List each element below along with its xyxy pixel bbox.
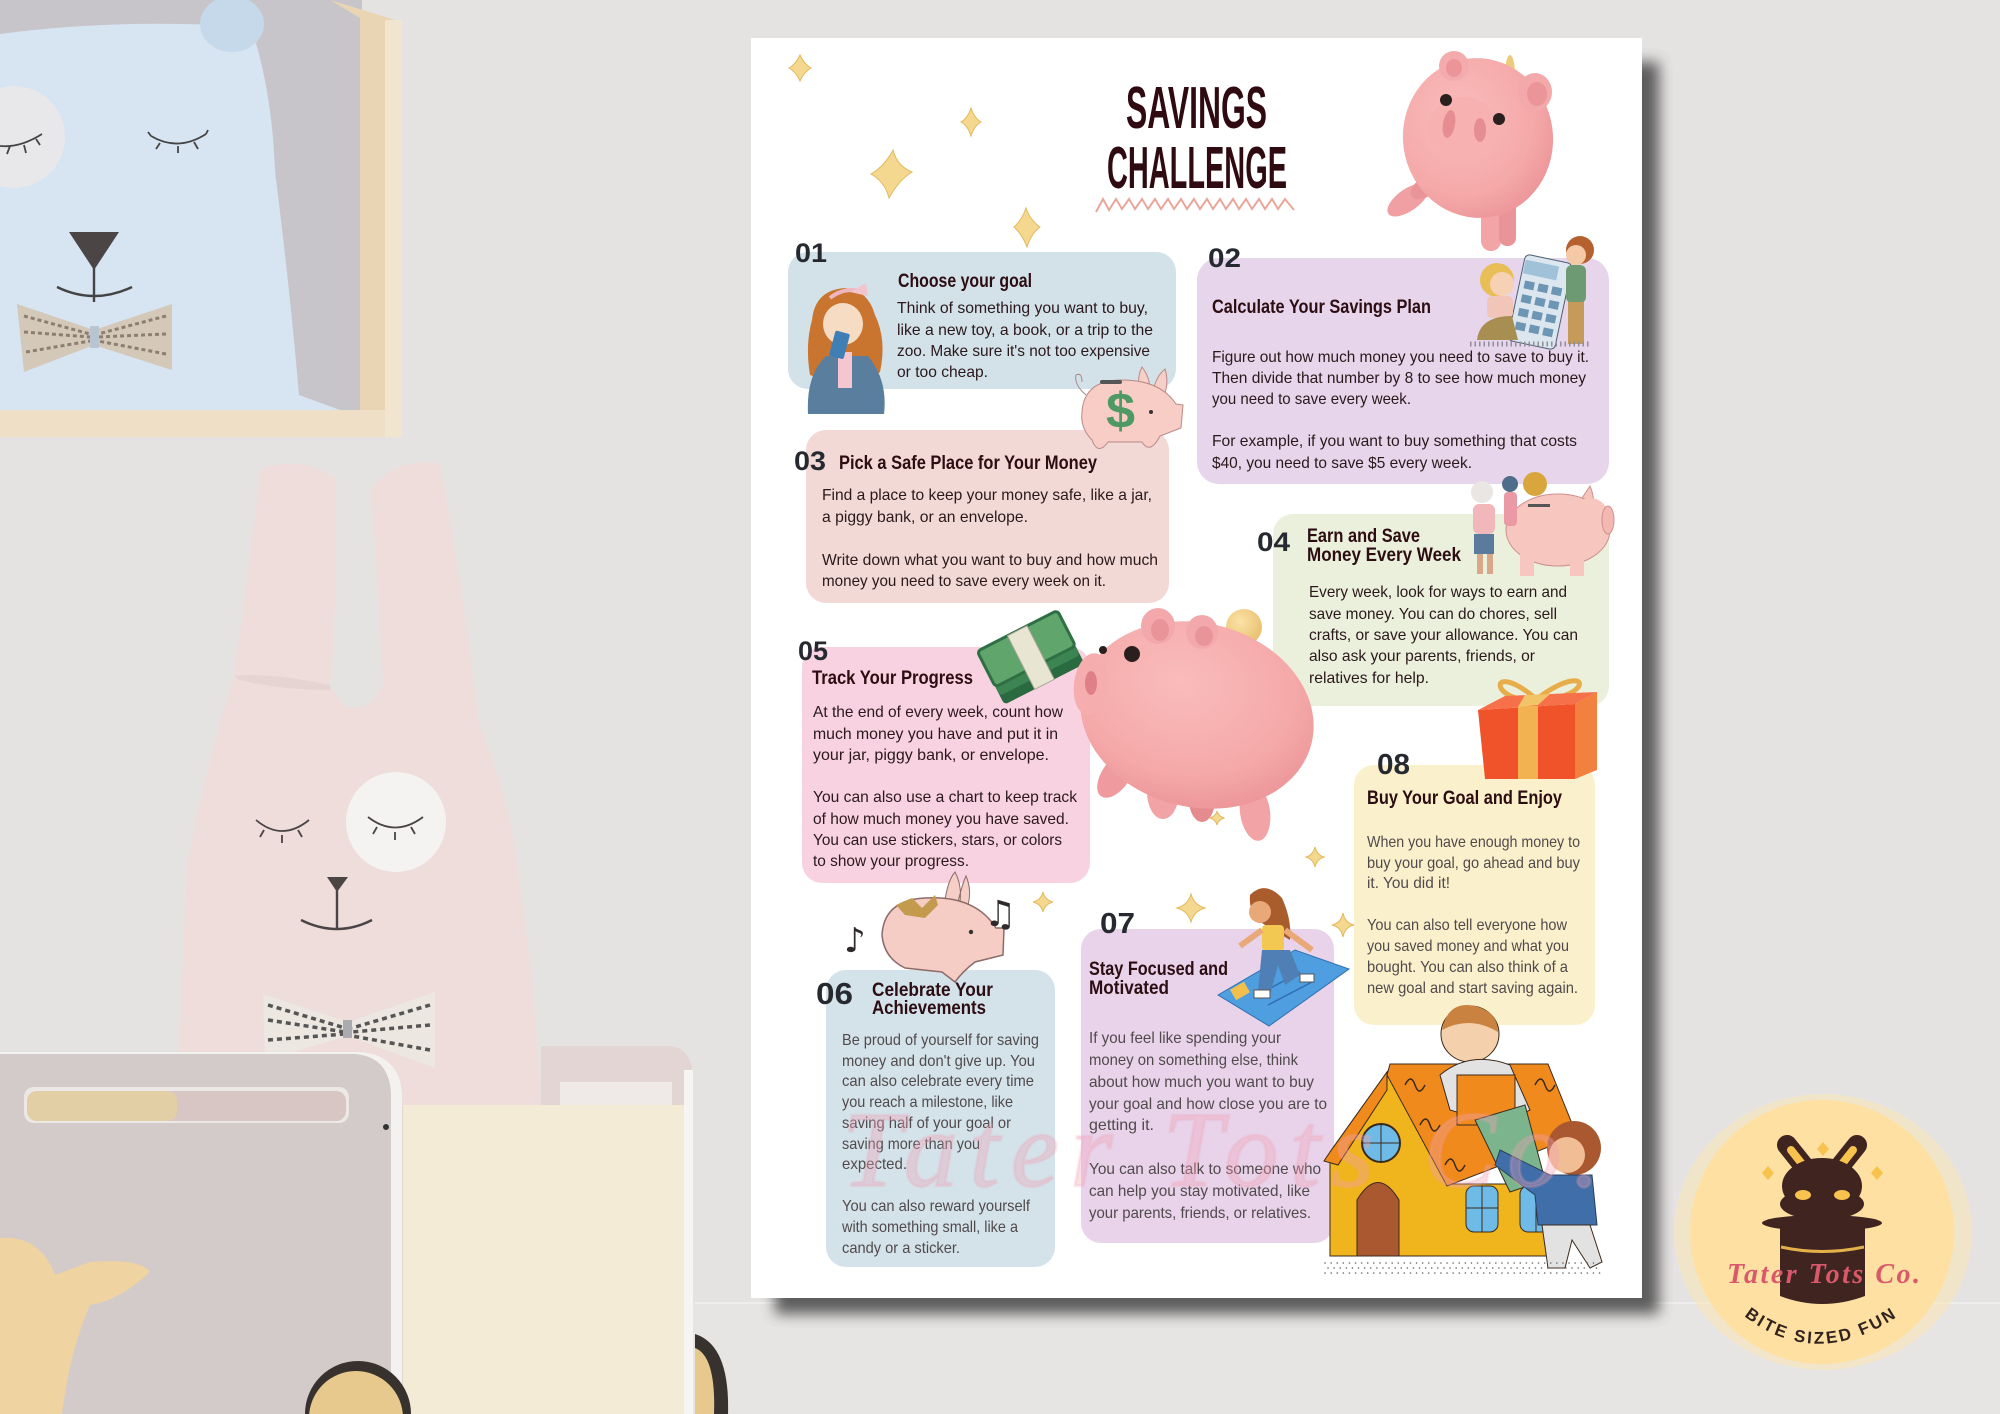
body text: [1367, 834, 1580, 997]
body text: can help you stay motivated, like: [1089, 1183, 1310, 1200]
body text: buy your goal, go ahead and buy: [1367, 855, 1580, 872]
body text: a piggy bank, or an envelope.: [822, 509, 1028, 526]
panel: step 7 stay focused: [1081, 908, 1334, 1243]
heading: Track Your Progress: [812, 668, 973, 689]
watermark: Tater Tots Co.: [842, 1091, 1600, 1210]
icon: 3D piggy top: [1382, 48, 1563, 251]
body text: Every week, look for ways to earn and: [1309, 584, 1567, 601]
body text: You can also tell everyone how: [1367, 917, 1567, 934]
icon: house with children: [1324, 1005, 1602, 1273]
panel: step 5 track progress: [798, 636, 1090, 883]
body text: your goal and how close you are to: [1089, 1096, 1327, 1113]
body text: like a new toy, a book, or a trip to the: [897, 322, 1153, 339]
icon: rabbit in top hat: [1762, 1142, 1883, 1304]
heading: [1089, 959, 1228, 999]
number 07: 07: [1100, 908, 1135, 940]
number 05: 05: [798, 636, 828, 666]
body text: If you feel like spending your: [1089, 1030, 1282, 1047]
icon: piggy bank with dollar: [1076, 367, 1183, 449]
logo name: Tater Tots Co.: [1727, 1259, 1920, 1290]
body text: saving half of your goal or: [842, 1115, 1012, 1132]
number 03: 03: [794, 446, 826, 476]
poster sheet: CHALLENGE: [1107, 135, 1287, 201]
heading: Money Every Week: [1307, 545, 1461, 566]
body text: [1309, 584, 1578, 687]
body text: expected.: [842, 1156, 907, 1173]
heading: Motivated: [1089, 978, 1169, 999]
panel: step 2 savings plan: [1197, 243, 1609, 484]
icon: pig with grandparent and child: [1471, 472, 1614, 576]
body text: can also celebrate every time: [842, 1073, 1034, 1090]
heading: Stay Focused and: [1089, 959, 1228, 980]
panel: step 6 celebrate: [816, 970, 1055, 1267]
body text: new goal and start saving again.: [1367, 980, 1578, 997]
icon: piggy bank with coins and notes: [844, 872, 1016, 982]
icon: big 3D piggy bank: [1060, 597, 1334, 843]
heading: Calculate Your Savings Plan: [1212, 297, 1431, 318]
body text: Think of something you want to buy,: [897, 300, 1148, 317]
icon: girl holding a card: [808, 283, 885, 414]
body text: You can also reward yourself: [842, 1198, 1031, 1215]
body text: about how much you want to buy: [1089, 1074, 1314, 1091]
body text: your jar, piggy bank, or envelope.: [813, 747, 1049, 764]
body text: [1212, 349, 1589, 472]
body text: At the end of every week, count how: [813, 704, 1063, 721]
logo: Tater Tots Co. badge: [1674, 1094, 1972, 1370]
title: [1107, 75, 1287, 201]
heading: Pick a Safe Place for Your Money: [839, 453, 1097, 474]
body text: You can also use a chart to keep track: [813, 789, 1078, 806]
number 06: 06: [816, 976, 853, 1011]
body text: you saved money and what you: [1367, 938, 1569, 955]
body text: [841, 1032, 1039, 1257]
heading: [872, 980, 994, 1019]
body text: it. You did it!: [1367, 875, 1450, 892]
toy box: [0, 1046, 728, 1414]
icon: piggy bank with coins and notes: ♪: [844, 921, 866, 961]
wooden toy: [0, 1238, 150, 1414]
heading: Celebrate Your: [872, 980, 994, 1001]
heading: Buy Your Goal and Enjoy: [1367, 788, 1562, 809]
panel: step 3 safe place: [794, 430, 1169, 603]
body text: getting it.: [1089, 1117, 1154, 1134]
body text: Write down what you want to buy and how much: [822, 552, 1158, 569]
body text: relatives for help.: [1309, 670, 1429, 687]
heading: Choose your goal: [898, 271, 1032, 292]
number 01: 01: [795, 238, 827, 268]
body text: You can also talk to someone who: [1089, 1161, 1321, 1178]
title: SAVINGS: [1126, 75, 1267, 141]
number 02: 02: [1208, 243, 1241, 273]
body text: money you need to save every week on it.: [822, 573, 1106, 590]
title zigzag underline: [1096, 199, 1294, 212]
body text: Figure out how much money you need to save to buy it.: [1212, 349, 1589, 366]
body text: [1089, 1030, 1327, 1222]
blue plush bear: [0, 0, 340, 410]
body text: money and don't give up. You: [842, 1053, 1035, 1070]
panel: step 4 earn and save: [1257, 514, 1609, 706]
body text: you reach a milestone, like: [842, 1094, 1013, 1111]
body text: to show your progress.: [813, 853, 969, 870]
icon: piggy bank with dollar: $: [1106, 383, 1135, 439]
icon: gift box: [1478, 681, 1597, 779]
number 04: 04: [1257, 527, 1290, 557]
icon: kids with calculator: [1470, 236, 1594, 350]
heading: [1307, 526, 1461, 566]
logo tagline: BITE SIZED FUN: [1745, 1307, 1896, 1344]
body text: [822, 487, 1158, 590]
body text: with something small, like a: [841, 1219, 1018, 1236]
heading: Earn and Save: [1307, 526, 1420, 547]
body text: also ask your parents, friends, or: [1309, 648, 1536, 665]
body text: candy or a sticker.: [842, 1240, 960, 1257]
pink plush bunny: [179, 462, 541, 1110]
panel: step 1 choose your goal: [788, 238, 1176, 389]
body text: money on something else, think: [1089, 1052, 1299, 1069]
poster sheet: [751, 38, 1642, 1298]
sparkles: [789, 55, 1354, 937]
body text: Find a place to keep your money safe, like a jar,: [822, 487, 1152, 504]
body text: or too cheap.: [897, 364, 988, 381]
body text: zoo. Make sure it's not too expensive: [897, 343, 1150, 360]
body text: When you have enough money to: [1367, 834, 1580, 851]
poster shadow: [775, 62, 1659, 1314]
icon: girl on credit card: [1218, 888, 1349, 1026]
wooden wall shelf: [0, 0, 402, 437]
body text: bought. You can also think of a: [1367, 959, 1568, 976]
body text: Then divide that number by 8 to see how much money: [1212, 370, 1586, 387]
body text: Be proud of yourself for saving: [842, 1032, 1039, 1049]
body text: $40, you need to save $5 every week.: [1212, 455, 1472, 472]
body text: [897, 300, 1153, 381]
body text: You can use stickers, stars, or colors: [813, 832, 1062, 849]
icon: stack of money: [977, 610, 1085, 705]
icon: piggy bank with coins and notes: ♫: [984, 894, 1016, 935]
number 08: 08: [1377, 749, 1410, 781]
body text: your parents, friends, or relatives.: [1089, 1205, 1311, 1222]
panel: step 8 buy your goal: [1354, 749, 1595, 1025]
body text: For example, if you want to buy something that costs: [1212, 433, 1577, 450]
body text: saving more than you: [842, 1136, 980, 1153]
body text: [813, 704, 1078, 870]
body text: crafts, or save your allowance. You can: [1309, 627, 1578, 644]
heading: Achievements: [872, 998, 986, 1019]
body text: of how much money you have saved.: [813, 811, 1069, 828]
body text: much money you have and put it in: [813, 726, 1058, 743]
body text: you need to save every week.: [1212, 391, 1411, 408]
body text: save money. You can do chores, sell: [1309, 606, 1557, 623]
